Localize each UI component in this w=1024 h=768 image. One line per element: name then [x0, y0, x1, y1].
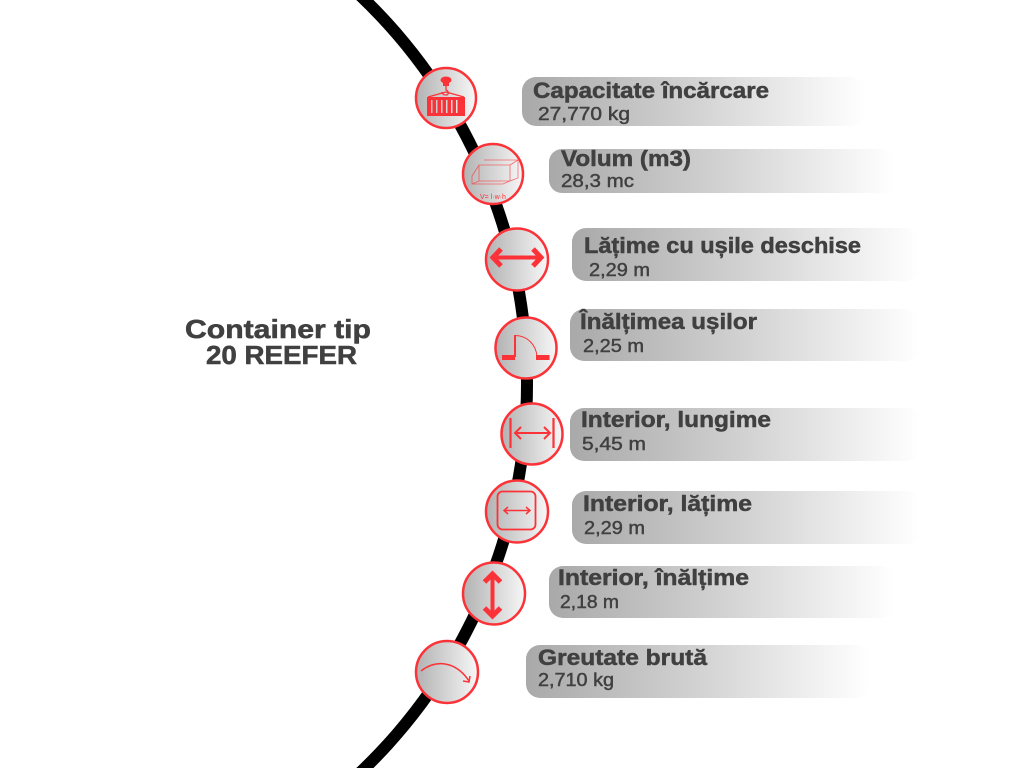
icon: volume box sketch: V= l·w·h: [480, 194, 506, 201]
panel: latime cu usile deschise: [572, 228, 920, 281]
panel: interior inaltime: Interior, înălțime: [558, 565, 749, 590]
panel: interior latime: 2,29 m: [584, 518, 645, 538]
icon: vertical double arrow: [463, 562, 525, 624]
icon: crane lifting container: [416, 68, 476, 128]
panel: capacitate incarcare: [522, 77, 865, 126]
panel: latime cu usile deschise: 2,29 m: [589, 260, 650, 280]
panel: latime cu usile deschise: Lățime cu ușile deschise: [584, 233, 861, 258]
panel: interior inaltime: 2,18 m: [560, 592, 619, 612]
icon: interior length: [502, 404, 562, 464]
panel: capacitate incarcare: 27,770 kg: [538, 104, 630, 124]
panel: interior lungime: 5,45 m: [582, 434, 646, 454]
panel: interior lungime: [570, 407, 920, 461]
icon: interior width: [486, 480, 548, 542]
panel: inaltimea usilor: 2,25 m: [583, 336, 644, 356]
panel: capacitate incarcare: Capacitate încărcare: [533, 78, 769, 103]
panel: inaltimea usilor: [570, 309, 920, 361]
panel: volum: [549, 146, 895, 193]
panel: greutate bruta: 2,710 kg: [538, 670, 614, 690]
panel: interior latime: [572, 491, 920, 544]
title: 20 REEFER: [206, 340, 357, 370]
panel: volum: Volum (m3): [561, 146, 691, 171]
timeline arc: [356, 0, 533, 768]
panel: interior lungime: Interior, lungime: [581, 407, 771, 432]
icon: curved weight arrow: [416, 641, 478, 703]
panel: interior inaltime: [549, 565, 895, 618]
title: Container tip: [185, 314, 371, 344]
icon: volume box sketch: [463, 144, 523, 204]
panel: inaltimea usilor: Înălțimea ușilor: [579, 309, 757, 334]
title: [185, 314, 371, 370]
panel: interior latime: Interior, lățime: [583, 491, 752, 516]
panel: greutate bruta: Greutate brută: [538, 645, 708, 670]
panel: greutate bruta: [526, 645, 870, 698]
icon: door opening: [496, 318, 556, 378]
panel: volum: 28,3 mc: [561, 171, 634, 191]
icon: horizontal double arrow: [486, 228, 548, 290]
